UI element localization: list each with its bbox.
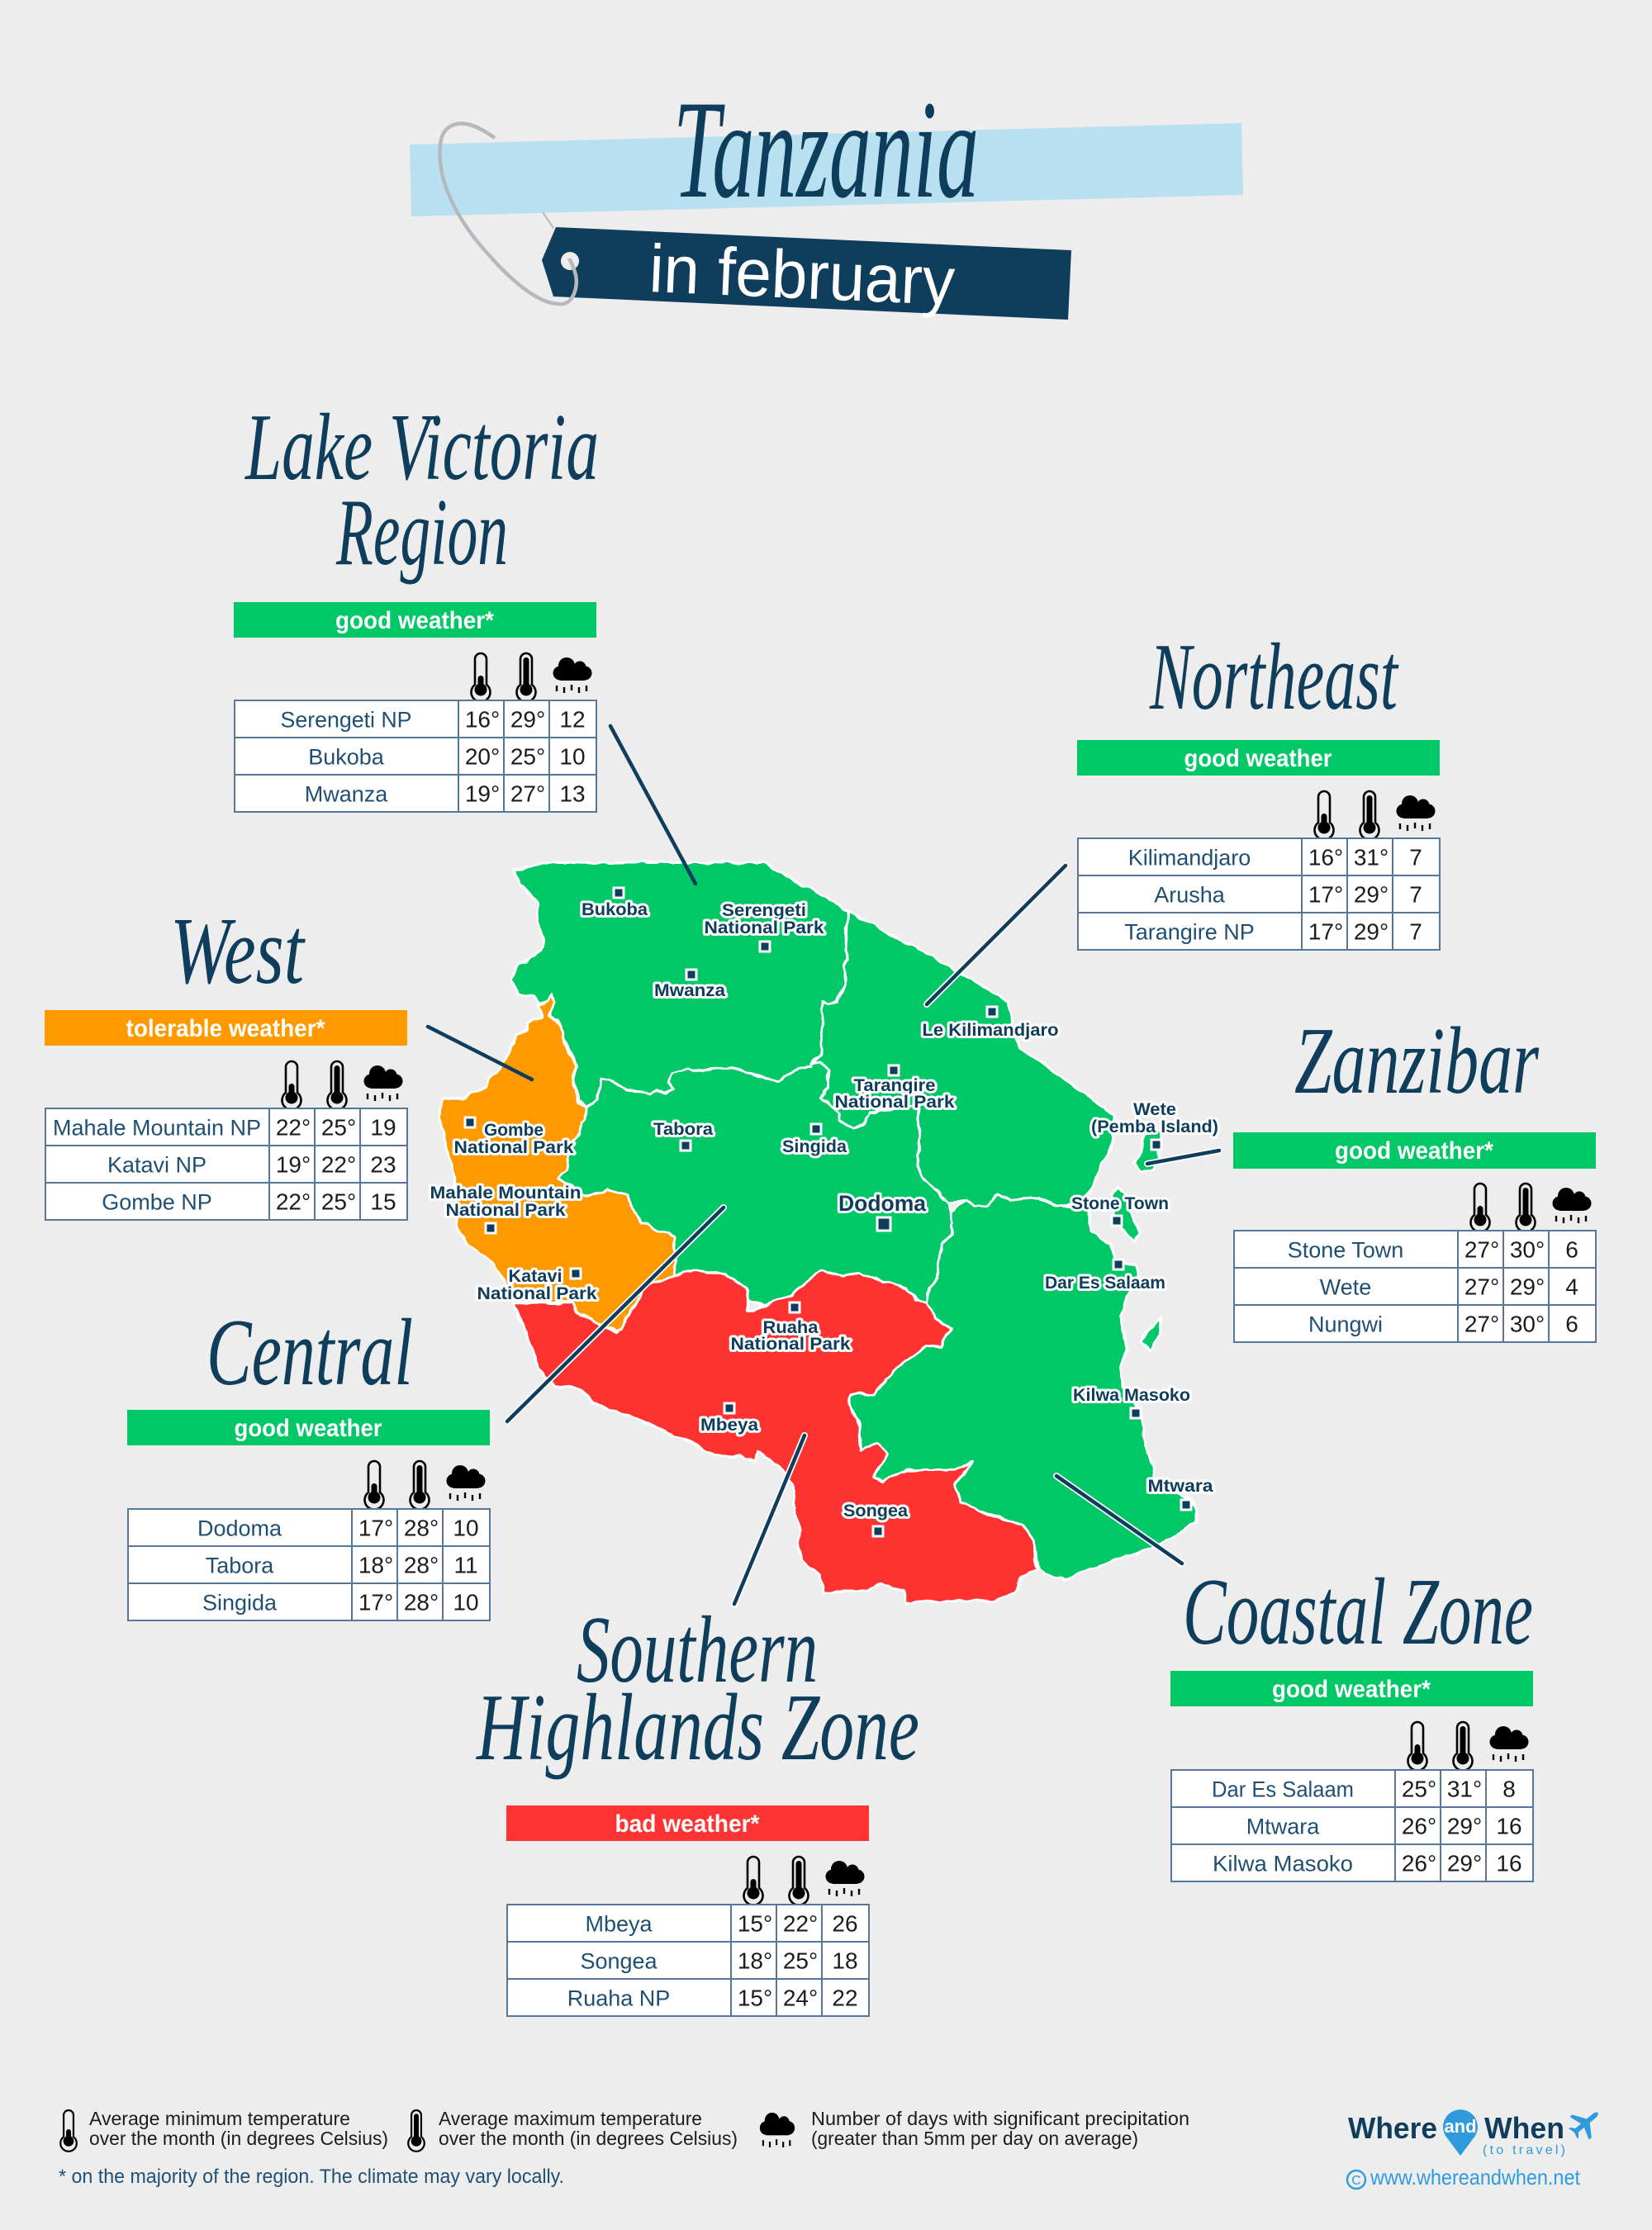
legend text: min temp <box>89 2108 388 2149</box>
tag string back <box>543 212 553 228</box>
panel: lake victoria region <box>234 395 599 812</box>
line: northeast <box>927 866 1066 1004</box>
row: Wete: Wete <box>1320 1275 1371 1300</box>
row: Bukoba <box>308 743 586 770</box>
label: Mahale: Mahale Mountain <box>430 1184 582 1203</box>
row: Songea: 18° <box>738 1948 772 1974</box>
row: Mbeya <box>585 1911 858 1936</box>
panel: northeast region <box>1077 624 1440 950</box>
row: Singida: 10 <box>453 1589 479 1616</box>
region: coastal <box>849 1193 1198 1581</box>
label: Ruaha: Ruaha <box>763 1318 819 1337</box>
heading: zanzibar: Zanzibar <box>1294 1008 1540 1113</box>
icon: min temp <box>471 653 491 702</box>
row: Wete: 4 <box>1565 1274 1578 1300</box>
row: Gombe NP: 25° <box>321 1189 356 1214</box>
marker: Songea <box>873 1526 883 1536</box>
marker: Kilimandjaro <box>987 1007 997 1017</box>
panel: southern highlands zone <box>476 1597 919 2016</box>
legend icon: max temp <box>408 2110 425 2152</box>
marker: Mahale <box>486 1223 496 1233</box>
row: Serengeti NP: 12 <box>559 707 586 732</box>
icon: rain <box>553 657 591 693</box>
label: Mahale NP: National Park <box>446 1201 566 1220</box>
weather table <box>127 1410 490 1620</box>
table body <box>235 700 596 812</box>
row: Songea: 25° <box>783 1948 818 1974</box>
bar text: bad weather* <box>615 1810 760 1838</box>
row: Gombe NP: 15 <box>370 1189 396 1214</box>
label: Dar Es Salaam: Dar Es Salaam <box>1045 1274 1165 1293</box>
marker: Mwanza <box>686 970 696 980</box>
row: Mbeya: 22° <box>783 1911 818 1936</box>
icon: min temp <box>1470 1184 1490 1232</box>
row: Serengeti NP: 29° <box>510 707 545 732</box>
row: Ruaha NP: 22 <box>832 1986 858 2010</box>
icon: min temp <box>1408 1722 1427 1771</box>
label: Stone Town: Stone Town <box>1071 1194 1169 1213</box>
icon: max temp <box>327 1061 347 1110</box>
legend text: max temp: over the month (in degrees Celsius) <box>439 2128 738 2149</box>
row: Mbeya: 15° <box>738 1911 772 1936</box>
legend text: rain: (greater than 5mm per day on average) <box>811 2128 1138 2149</box>
row: Wete: 27° <box>1464 1274 1499 1300</box>
label: Tabora: Tabora <box>653 1120 713 1139</box>
icon: rain <box>826 1861 864 1896</box>
legend text: min temp: over the month (in degrees Celsius) <box>89 2128 388 2149</box>
row: Ruaha NP: 15° <box>738 1986 772 2010</box>
row: Dar Es Salaam: Dar Es Salaam <box>1212 1777 1354 1802</box>
line: coastal core <box>1056 1476 1182 1563</box>
icon: max temp <box>1454 1722 1472 1771</box>
marker: Tarangire <box>889 1065 899 1075</box>
title block <box>410 72 1243 320</box>
row: Tarangire NP: 17° <box>1308 918 1343 945</box>
marker: Stone Town <box>1112 1216 1122 1226</box>
marker: Ruaha <box>790 1302 800 1312</box>
row: Stone Town <box>1288 1237 1578 1262</box>
row: Dodoma: 10 <box>453 1515 479 1541</box>
line: northeast core <box>927 866 1066 1004</box>
row: Tabora: Tabora <box>206 1553 274 1578</box>
table body <box>45 1108 407 1220</box>
row: Mahale Mountain NP: 19 <box>370 1115 396 1140</box>
table body <box>128 1509 490 1620</box>
row: Mwanza: 19° <box>465 781 500 806</box>
tag hole <box>561 252 579 270</box>
weather bar <box>234 602 596 638</box>
icon: min temp <box>1315 791 1333 840</box>
label: Mtwara: Mtwara <box>1148 1477 1213 1496</box>
title text: Tanzania <box>673 72 979 227</box>
row: Katavi NP: 22° <box>321 1151 356 1178</box>
row: Mbeya: Mbeya <box>585 1911 653 1936</box>
row: Tabora: 11 <box>453 1553 478 1578</box>
row: Dodoma: 17° <box>358 1515 393 1541</box>
table body <box>1234 1231 1596 1342</box>
row: Kilwa Masoko <box>1213 1850 1522 1877</box>
heading: southern: Southern <box>577 1597 818 1702</box>
footnote: * on the majority of the region. The climate may vary locally. <box>59 2166 564 2188</box>
label: Singida: Singida <box>782 1137 847 1156</box>
row: Bukoba: 25° <box>510 743 545 770</box>
weather table <box>506 1805 869 2016</box>
copyright mark: C <box>1351 2174 1361 2188</box>
icon: rain <box>1396 795 1436 831</box>
heading: west: West <box>170 899 306 1004</box>
line: southern core <box>734 1435 805 1604</box>
copyright mark <box>1347 2171 1365 2189</box>
label: Gombe NP: National Park <box>454 1138 574 1157</box>
row: Tarangire NP <box>1124 918 1422 945</box>
row: Tarangire NP: Tarangire NP <box>1124 920 1255 945</box>
leader lines <box>428 726 1219 1604</box>
region: northeast <box>814 911 1114 1207</box>
row: Dar Es Salaam <box>1212 1776 1516 1802</box>
label: Mwanza: Mwanza <box>654 981 725 1000</box>
row: Tabora: 18° <box>358 1553 393 1578</box>
table body <box>1171 1770 1533 1881</box>
row: Gombe NP: 22° <box>276 1189 311 1214</box>
row: Singida <box>202 1589 479 1616</box>
map labels and markers <box>430 888 1218 1536</box>
line: coastal <box>1056 1476 1182 1563</box>
row: Tarangire NP: 29° <box>1354 918 1389 945</box>
line: west <box>428 1027 532 1079</box>
region: west <box>439 994 675 1334</box>
row: Gombe NP <box>102 1189 396 1214</box>
row: Songea <box>580 1948 858 1974</box>
row: Tarangire NP: 7 <box>1409 918 1422 945</box>
row: Arusha <box>1154 882 1422 907</box>
label: Kilimandjaro: Le Kilimandjaro <box>922 1021 1059 1040</box>
row: Kilimandjaro: 31° <box>1354 844 1389 871</box>
website url: www.whereandwhen.net <box>1370 2165 1581 2190</box>
bar text: good weather* <box>1335 1137 1493 1165</box>
logo pin <box>1443 2109 1478 2156</box>
row: Mwanza: 13 <box>559 781 586 806</box>
row: Arusha: 29° <box>1354 882 1389 907</box>
row: Mtwara: Mtwara <box>1246 1814 1320 1839</box>
row: Mtwara: 29° <box>1447 1814 1482 1839</box>
row: Mahale Mountain NP <box>53 1115 396 1140</box>
region: lake victoria <box>511 862 849 1107</box>
legend <box>59 2108 1189 2188</box>
icon: min temp <box>282 1061 301 1110</box>
icon: max temp <box>517 653 535 702</box>
row: Serengeti NP: 16° <box>465 707 500 732</box>
row: Kilwa Masoko: Kilwa Masoko <box>1213 1852 1353 1877</box>
row: Ruaha NP <box>567 1986 858 2010</box>
label: Wete: Wete <box>1133 1100 1176 1119</box>
row: Songea: 18 <box>832 1948 858 1974</box>
weather bar <box>45 1010 407 1046</box>
heading: highlands zone: Highlands Zone <box>476 1675 919 1780</box>
legend text: max temp <box>439 2108 738 2149</box>
heading: lake victoria: Lake Victoria <box>244 395 599 500</box>
row: Singida: 17° <box>358 1589 393 1616</box>
row: Mwanza <box>305 781 586 806</box>
weather bar <box>1170 1671 1533 1706</box>
row: Stone Town: 27° <box>1464 1237 1499 1262</box>
weather table <box>234 602 596 812</box>
weather table <box>1077 740 1440 950</box>
line: southern <box>734 1435 805 1604</box>
marker: Dodoma <box>877 1217 890 1231</box>
bar text: good weather* <box>335 607 494 634</box>
row: Bukoba: 20° <box>465 743 500 770</box>
logo: where and when <box>1347 2101 1607 2190</box>
line: central core <box>507 1208 724 1421</box>
label: Ruaha NP: National Park <box>730 1335 851 1354</box>
row: Serengeti NP <box>281 707 586 732</box>
marker: Mbeya <box>724 1403 734 1413</box>
label: Songea: Songea <box>843 1502 908 1521</box>
tag string <box>439 124 577 304</box>
row: Tabora: 28° <box>404 1553 439 1578</box>
logo word: When: When <box>1484 2111 1564 2145</box>
row: Kilwa Masoko: 16 <box>1496 1850 1522 1877</box>
row: Bukoba: 10 <box>559 743 586 770</box>
marker: Bukoba <box>614 888 624 898</box>
row: Dodoma: 28° <box>404 1515 439 1541</box>
label: Pemba Island: (Pemba Island) <box>1091 1117 1218 1136</box>
weather bar <box>127 1410 490 1445</box>
label: Kilwa Masoko: Kilwa Masoko <box>1073 1386 1190 1405</box>
row: Mwanza: Mwanza <box>305 781 388 806</box>
row: Arusha: Arusha <box>1154 882 1226 907</box>
heading: central: Central <box>206 1300 413 1405</box>
line: lake victoria <box>610 726 695 884</box>
legend text: rain <box>811 2108 1189 2149</box>
panel: zanzibar region <box>1233 1008 1596 1342</box>
island: mafia <box>1139 1319 1162 1350</box>
map of Tanzania <box>439 862 1198 1602</box>
row: Mwanza: 27° <box>510 781 545 806</box>
icon: rain <box>446 1465 486 1501</box>
legend text: max temp: Average maximum temperature <box>439 2108 702 2129</box>
panel: west region <box>45 899 407 1220</box>
row: Singida: Singida <box>202 1591 278 1616</box>
legend text: rain: Number of days with significant precipitation <box>811 2108 1189 2129</box>
row: Dodoma: Dodoma <box>197 1516 282 1541</box>
label: Gombe: Gombe <box>484 1121 544 1140</box>
row: Katavi NP: Katavi NP <box>107 1153 206 1178</box>
weather table <box>45 1010 407 1220</box>
row: Nungwi <box>1308 1312 1578 1336</box>
marker: Serengeti <box>760 942 770 951</box>
row: Tabora <box>206 1553 478 1578</box>
island: zanzibar <box>1112 1187 1141 1241</box>
marker: Gombe <box>465 1117 475 1127</box>
row: Kilwa Masoko: 29° <box>1447 1850 1482 1877</box>
legend icon: rain <box>760 2113 795 2147</box>
row: Wete <box>1320 1274 1578 1300</box>
heading: northeast: Northeast <box>1149 624 1399 729</box>
marker: Singida <box>811 1124 821 1134</box>
row: Arusha: 17° <box>1308 882 1343 907</box>
bar text: tolerable weather* <box>126 1015 325 1042</box>
icon: max temp <box>1360 791 1379 840</box>
subtitle tag <box>542 227 1071 320</box>
icon: rain <box>363 1065 403 1101</box>
bar text: good weather* <box>1272 1676 1431 1703</box>
row: Nungwi: Nungwi <box>1308 1312 1383 1336</box>
row: Dar Es Salaam: 25° <box>1402 1776 1436 1802</box>
label: Mbeya: Mbeya <box>700 1416 758 1435</box>
logo plane <box>1564 2101 1607 2145</box>
label: Serengeti: Serengeti <box>722 901 806 920</box>
weather bar <box>1077 740 1440 776</box>
row: Nungwi: 6 <box>1565 1312 1578 1336</box>
marker: Tabora <box>681 1141 691 1151</box>
line: zanzibar core <box>1147 1151 1219 1164</box>
table body <box>1078 838 1440 950</box>
label: Tarangire: Tarangire <box>854 1076 935 1095</box>
row: Katavi NP: 19° <box>276 1151 311 1178</box>
row: Stone Town: 6 <box>1565 1237 1578 1262</box>
row: Kilimandjaro: Kilimandjaro <box>1128 846 1251 871</box>
icon: max temp <box>410 1461 430 1510</box>
heading: region: Region <box>335 480 508 585</box>
row: Arusha: 7 <box>1409 882 1422 907</box>
row: Dar Es Salaam: 8 <box>1502 1776 1516 1802</box>
panel: central region <box>127 1300 490 1620</box>
marker: Wete <box>1151 1140 1161 1150</box>
row: Kilwa Masoko: 26° <box>1402 1850 1436 1877</box>
logo tagline: (to travel) <box>1483 2143 1565 2157</box>
row: Bukoba: Bukoba <box>308 745 385 770</box>
row: Ruaha NP: Ruaha NP <box>567 1986 670 2010</box>
label: Tarangire NP: National Park <box>834 1093 955 1112</box>
label: Bukoba: Bukoba <box>582 900 648 919</box>
row: Singida: 28° <box>404 1589 439 1616</box>
row: Mtwara: 16 <box>1496 1814 1522 1839</box>
bar text: good weather <box>235 1415 382 1442</box>
weather bar <box>506 1805 869 1841</box>
marker: Dar Es Salaam <box>1113 1260 1123 1269</box>
row: Mtwara: 26° <box>1402 1814 1436 1839</box>
row: Kilimandjaro <box>1128 844 1422 871</box>
line: central <box>507 1208 724 1421</box>
title band <box>410 123 1243 216</box>
logo word: Where: Where <box>1348 2111 1437 2145</box>
icon: rain <box>1490 1726 1528 1762</box>
panel: coastal zone <box>1170 1559 1533 1881</box>
row: Dodoma <box>197 1515 479 1541</box>
row: Kilimandjaro: 16° <box>1308 844 1343 871</box>
line: zanzibar <box>1147 1151 1219 1164</box>
icon: max temp <box>790 1857 808 1905</box>
row: Stone Town: Stone Town <box>1288 1237 1403 1262</box>
label: Katavi NP: National Park <box>477 1284 597 1303</box>
row: Mbeya: 26 <box>832 1911 858 1936</box>
island: pemba <box>1135 1131 1161 1172</box>
marker: Mtwara <box>1181 1500 1191 1510</box>
row: Mahale Mountain NP: Mahale Mountain NP <box>53 1115 261 1140</box>
label: Serengeti NP: National Park <box>704 918 824 937</box>
row: Dar Es Salaam: 31° <box>1447 1776 1482 1802</box>
marker: Katavi <box>571 1269 581 1279</box>
row: Wete: 29° <box>1510 1274 1545 1300</box>
row: Kilimandjaro: 7 <box>1409 844 1422 871</box>
row: Stone Town: 30° <box>1510 1237 1545 1262</box>
table body <box>507 1905 869 2016</box>
row: Katavi NP <box>107 1151 396 1178</box>
row: Nungwi: 30° <box>1510 1312 1545 1336</box>
subtitle text: in february <box>648 231 957 320</box>
bar text: good weather <box>1184 745 1332 772</box>
logo word: and: and <box>1444 2116 1477 2137</box>
legend text: min temp: Average minimum temperature <box>89 2108 350 2129</box>
label: Katavi: Katavi <box>509 1267 562 1286</box>
icon: min temp <box>743 1857 763 1905</box>
weather table <box>1233 1132 1596 1342</box>
row: Ruaha NP: 24° <box>783 1986 818 2010</box>
weather table <box>1170 1671 1533 1881</box>
icon: min temp <box>365 1461 383 1510</box>
row: Katavi NP: 23 <box>370 1151 396 1178</box>
legend icon: min temp <box>60 2110 77 2152</box>
icon: rain <box>1553 1188 1591 1223</box>
weather bar <box>1233 1132 1596 1169</box>
row: Gombe NP: Gombe NP <box>102 1189 212 1214</box>
row: Mtwara <box>1246 1814 1522 1839</box>
region: central <box>526 1055 952 1323</box>
marker: Kilwa Masoko <box>1131 1408 1141 1418</box>
region: southern highlands <box>514 1269 1036 1602</box>
row: Serengeti NP: Serengeti NP <box>281 707 411 732</box>
row: Mahale Mountain NP: 22° <box>276 1115 311 1140</box>
row: Songea: Songea <box>580 1949 658 1974</box>
icon: max temp <box>1517 1184 1535 1232</box>
row: Mahale Mountain NP: 25° <box>321 1115 356 1140</box>
row: Nungwi: 27° <box>1464 1312 1499 1336</box>
label: Dodoma: Dodoma <box>838 1191 927 1216</box>
